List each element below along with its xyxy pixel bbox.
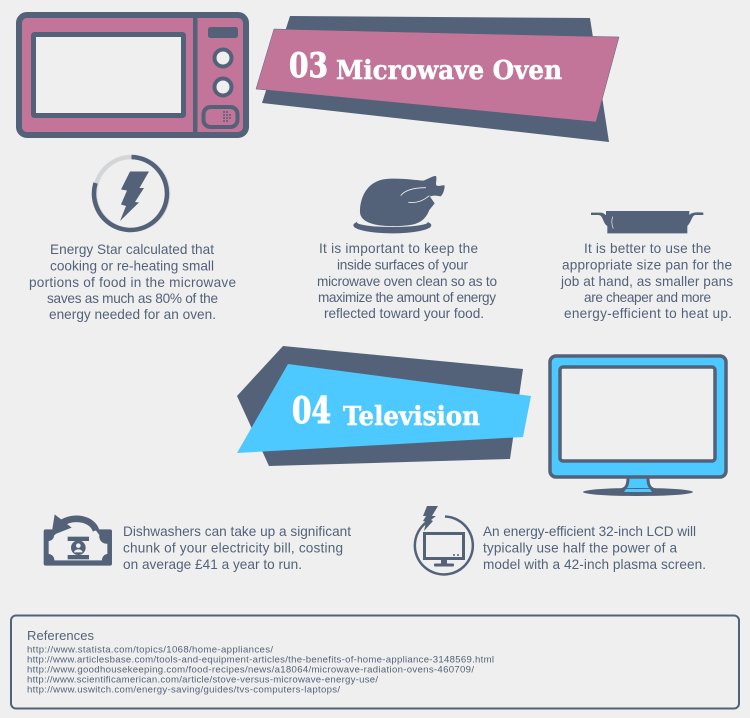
icon: banknote with return arrow [44,514,112,566]
text: clean surfaces: reflected toward your food. [324,306,484,321]
text: energy star: energy needed for an oven. [49,307,216,322]
text: energy star [29,242,236,322]
icon: microwave oven [19,15,246,135]
text: clean surfaces: microwave oven clean so as to [317,274,497,289]
text: pan size: appropriate size pan for the [562,258,732,272]
text: clean surfaces [317,241,497,321]
text: clean surfaces: inside surfaces of your [337,258,468,272]
text: energy-efficient LCD [483,524,706,572]
text: energy-efficient LCD: typically use half the power of a [483,540,677,556]
banner: 04 Television: 04 [292,390,331,432]
text: clean surfaces: maximize the amount of energy [318,290,496,305]
text: dishwashers [123,524,351,572]
text: pan size: job at hand, as smaller pans [560,274,733,289]
banner: 03 Microwave Oven [256,16,619,142]
panel: references: References [27,628,94,643]
text: energy-efficient LCD: model with a 42-inch plasma screen. [483,557,706,572]
icon: lightning in circle [94,157,168,230]
text: pan size: are cheaper and more [584,290,711,305]
banner: 03 Microwave Oven: 03 [289,46,328,86]
panel: references: http://www.scientificamerican.com/article/stove-versus-microwave-energy-use/ [27,674,378,686]
banner: 03 Microwave Oven: Microwave Oven [336,56,562,86]
text: dishwashers: Dishwashers can take up a significant [123,524,351,539]
banner: 04 Television: Television [343,402,480,432]
panel: references: http://www.articlesbase.com/tools-and-equipment-articles/the-benefits-of-home-appliance-3148569.html [27,654,494,666]
panel: references [11,616,739,708]
icon: monitor in circle with bolt [415,506,473,574]
text: energy star: cooking or re-heating small [50,258,214,274]
banner: 04 Television [237,346,531,466]
icon: pan [591,211,703,233]
text: pan size [560,241,733,321]
panel: references: http://www.statista.com/topics/1068/home-appliances/ [27,644,273,656]
panel: references: http://www.goodhousekeeping.com/food-recipes/news/a18064/microwave-radiation-ovens-460709/ [27,664,474,676]
text: energy star: saves as much as 80% of the [47,291,218,306]
text: energy star: Energy Star calculated that [50,242,214,257]
text: pan size: It is better to use the [584,241,711,256]
text: clean surfaces: It is important to keep the [319,241,478,256]
icon: television [550,356,726,496]
text: dishwashers: chunk of your electricity bill, costing [123,540,343,556]
panel: references: http://www.uswitch.com/energy-saving/guides/tvs-computers-laptops/ [27,684,340,696]
text: dishwashers: on average £41 a year to run. [123,557,302,572]
text: pan size: energy-efficient to heat up. [564,306,732,321]
text: energy star: portions of food in the microwave [29,275,236,290]
text: energy-efficient LCD: An energy-efficient 32-inch LCD will [483,524,696,539]
icon: roast chicken on plate [353,176,445,233]
